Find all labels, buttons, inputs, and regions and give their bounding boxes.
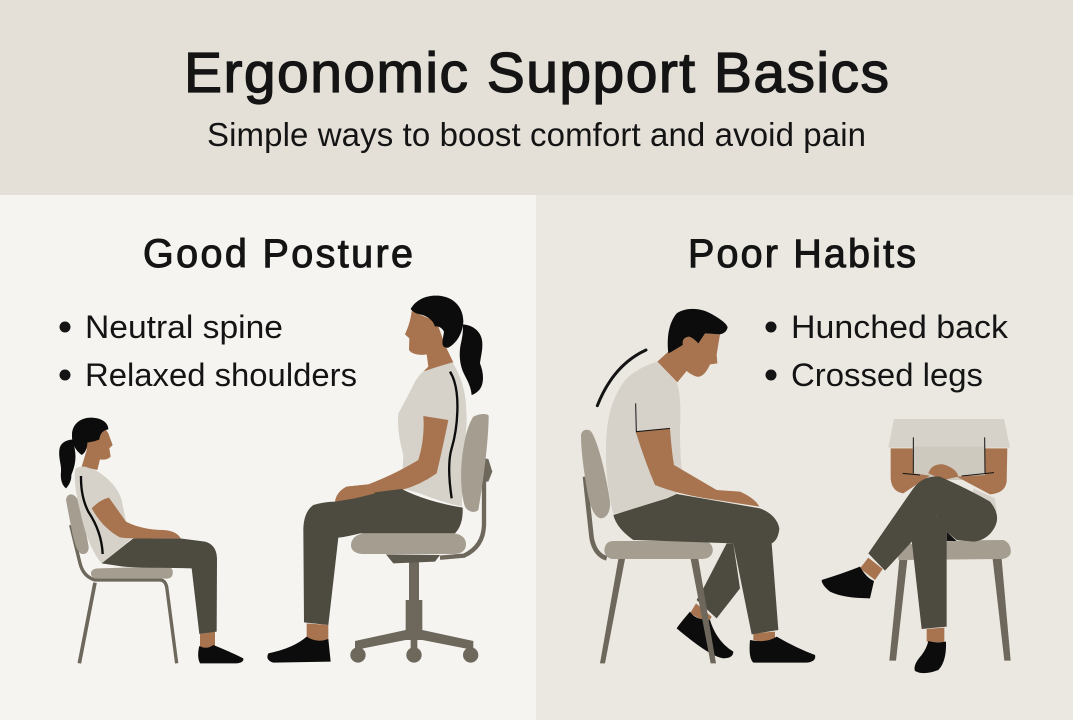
figure: woman on office chair [267, 296, 492, 663]
bullet list: poor habits: Crossed legs [791, 357, 983, 393]
bullet list: good posture: Relaxed shoulders [85, 357, 357, 393]
panel: good posture [0, 195, 536, 720]
heading: poor habits: Poor Habits [688, 232, 916, 276]
bullet list: poor habits [766, 309, 1009, 393]
bullet list: good posture: Neutral spine [85, 309, 283, 345]
figure: crossed legs, front view [822, 419, 1011, 673]
title: Ergonomic Support Basics [184, 41, 889, 105]
icon: hunched back arc [597, 350, 646, 406]
heading: good posture: Good Posture [143, 232, 413, 276]
subtitle: Simple ways to boost comfort and avoid pain [207, 116, 866, 153]
panel: header [0, 0, 1073, 195]
figure: woman on simple chair [59, 418, 243, 663]
figure: hunched man, side view [581, 309, 815, 663]
panel: poor habits [536, 195, 1073, 720]
bullet list: poor habits: Hunched back [791, 309, 1009, 345]
bullet list: good posture [60, 309, 357, 393]
